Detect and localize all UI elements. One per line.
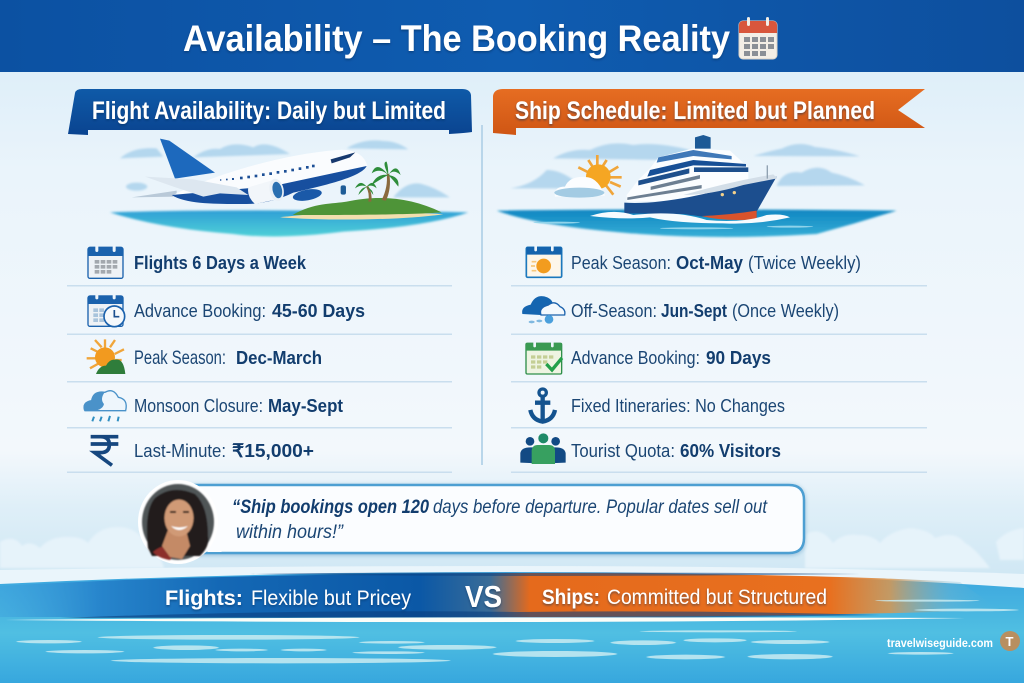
icon: storm cloud bbox=[522, 296, 565, 324]
text: peak season twice weekly: Oct-May bbox=[676, 252, 744, 273]
label: ships: Committed but Structured bbox=[607, 586, 827, 609]
engine bbox=[248, 180, 282, 204]
text: monsoon closure: Monsoon Closure: bbox=[134, 395, 263, 416]
panel: ship schedule bbox=[493, 89, 927, 473]
icon: calendar in title bbox=[739, 17, 777, 59]
background clouds near the horizon bbox=[0, 527, 1024, 568]
label: flights: Flights: bbox=[165, 587, 243, 610]
text: last minute price: Last-Minute: bbox=[134, 440, 226, 461]
label: flights bbox=[165, 587, 411, 610]
header bar bbox=[0, 0, 1024, 72]
horizon light strip bbox=[0, 566, 1024, 600]
hull bbox=[624, 177, 777, 219]
quote text bbox=[232, 497, 768, 543]
icon: calendar with sun bbox=[526, 245, 562, 277]
quote text: days before departure. Popular dates sell out bbox=[433, 497, 768, 518]
text: tourist quota: 60% Visitors bbox=[680, 440, 781, 461]
text: advance booking bbox=[134, 300, 365, 321]
text: off season: (Once Weekly) bbox=[732, 300, 839, 321]
text: peak season: Peak Season: bbox=[134, 347, 226, 369]
callout: expert quote bbox=[138, 480, 804, 564]
speech bubble bbox=[192, 485, 804, 553]
text: last minute price bbox=[134, 440, 314, 461]
icon: calendar bbox=[88, 245, 123, 278]
sun bbox=[578, 155, 622, 195]
water reflections bbox=[16, 600, 1019, 663]
row dividers bbox=[511, 285, 927, 473]
waves bbox=[590, 212, 790, 224]
icon: calendar with clock bbox=[88, 293, 125, 327]
banner: flight heading bbox=[68, 89, 472, 135]
text: off season: Jun-Sept bbox=[661, 300, 727, 321]
avatar: woman portrait bbox=[138, 480, 218, 564]
text: advance booking 90 days: Advance Booking: bbox=[571, 347, 700, 368]
text: fixed itineraries: Fixed Itineraries: No Changes bbox=[571, 395, 785, 416]
panel: flight availability bbox=[67, 89, 472, 473]
text: last minute price: ₹15,000+ bbox=[232, 440, 314, 461]
banner: ship heading: Ship Schedule: Limited but Planned bbox=[515, 97, 875, 125]
illustration: cruise ship bbox=[497, 135, 897, 237]
tail bbox=[160, 139, 215, 179]
text: peak season bbox=[134, 347, 322, 369]
banner: flight heading: Flight Availability: Daily but Limited bbox=[92, 97, 446, 125]
text: peak season twice weekly: (Twice Weekly) bbox=[748, 252, 861, 273]
quote text: within hours!” bbox=[236, 522, 345, 543]
list: flight facts bbox=[67, 245, 452, 473]
icon: rupee bbox=[91, 437, 118, 465]
comparison band bbox=[0, 573, 1000, 622]
text: flights per week: Flights 6 Days a Week bbox=[134, 252, 307, 273]
watermark: T bbox=[1006, 634, 1014, 649]
text: off season bbox=[571, 300, 839, 321]
belly bbox=[172, 166, 367, 204]
sea bbox=[497, 209, 897, 237]
water at the bottom bbox=[0, 572, 1024, 683]
icon: sun over hill bbox=[87, 339, 125, 374]
text: monsoon closure: May-Sept bbox=[268, 395, 343, 416]
banner: ship heading bbox=[493, 89, 925, 135]
illustration: plane and island bbox=[110, 139, 468, 236]
label: flights: Flexible but Pricey bbox=[251, 587, 411, 610]
text: advance booking 90 days: 90 Days bbox=[706, 347, 771, 368]
row dividers bbox=[67, 285, 452, 473]
icon: anchor bbox=[530, 389, 555, 422]
text: peak season twice weekly bbox=[571, 252, 861, 273]
text: tourist quota: Tourist Quota: bbox=[571, 440, 675, 461]
label: ships: Ships: bbox=[542, 586, 600, 609]
icon: monsoon cloud bbox=[83, 391, 126, 421]
text: tourist quota bbox=[571, 440, 781, 461]
title: Availability – The Booking Reality bbox=[183, 18, 730, 59]
vertical divider between columns bbox=[481, 125, 483, 465]
text: advance booking: Advance Booking: bbox=[134, 300, 266, 321]
wing bbox=[145, 177, 248, 197]
text: peak season: Dec-March bbox=[236, 347, 322, 368]
text: advance booking: 45-60 Days bbox=[272, 300, 365, 321]
island bbox=[280, 212, 443, 220]
list: ship facts bbox=[511, 245, 927, 473]
label: VS: VS bbox=[465, 579, 502, 614]
quote text: “Ship bookings open 120 bbox=[232, 497, 429, 518]
superstructure bbox=[627, 148, 748, 202]
text: peak season twice weekly: Peak Season: bbox=[571, 252, 671, 273]
icon: group of people bbox=[520, 433, 566, 464]
fuselage bbox=[173, 150, 367, 197]
watermark bbox=[887, 631, 1020, 651]
icon: green calendar with check bbox=[526, 341, 562, 374]
watermark: travelwiseguide.com bbox=[887, 638, 993, 650]
text: off season: Off-Season: bbox=[571, 300, 657, 321]
